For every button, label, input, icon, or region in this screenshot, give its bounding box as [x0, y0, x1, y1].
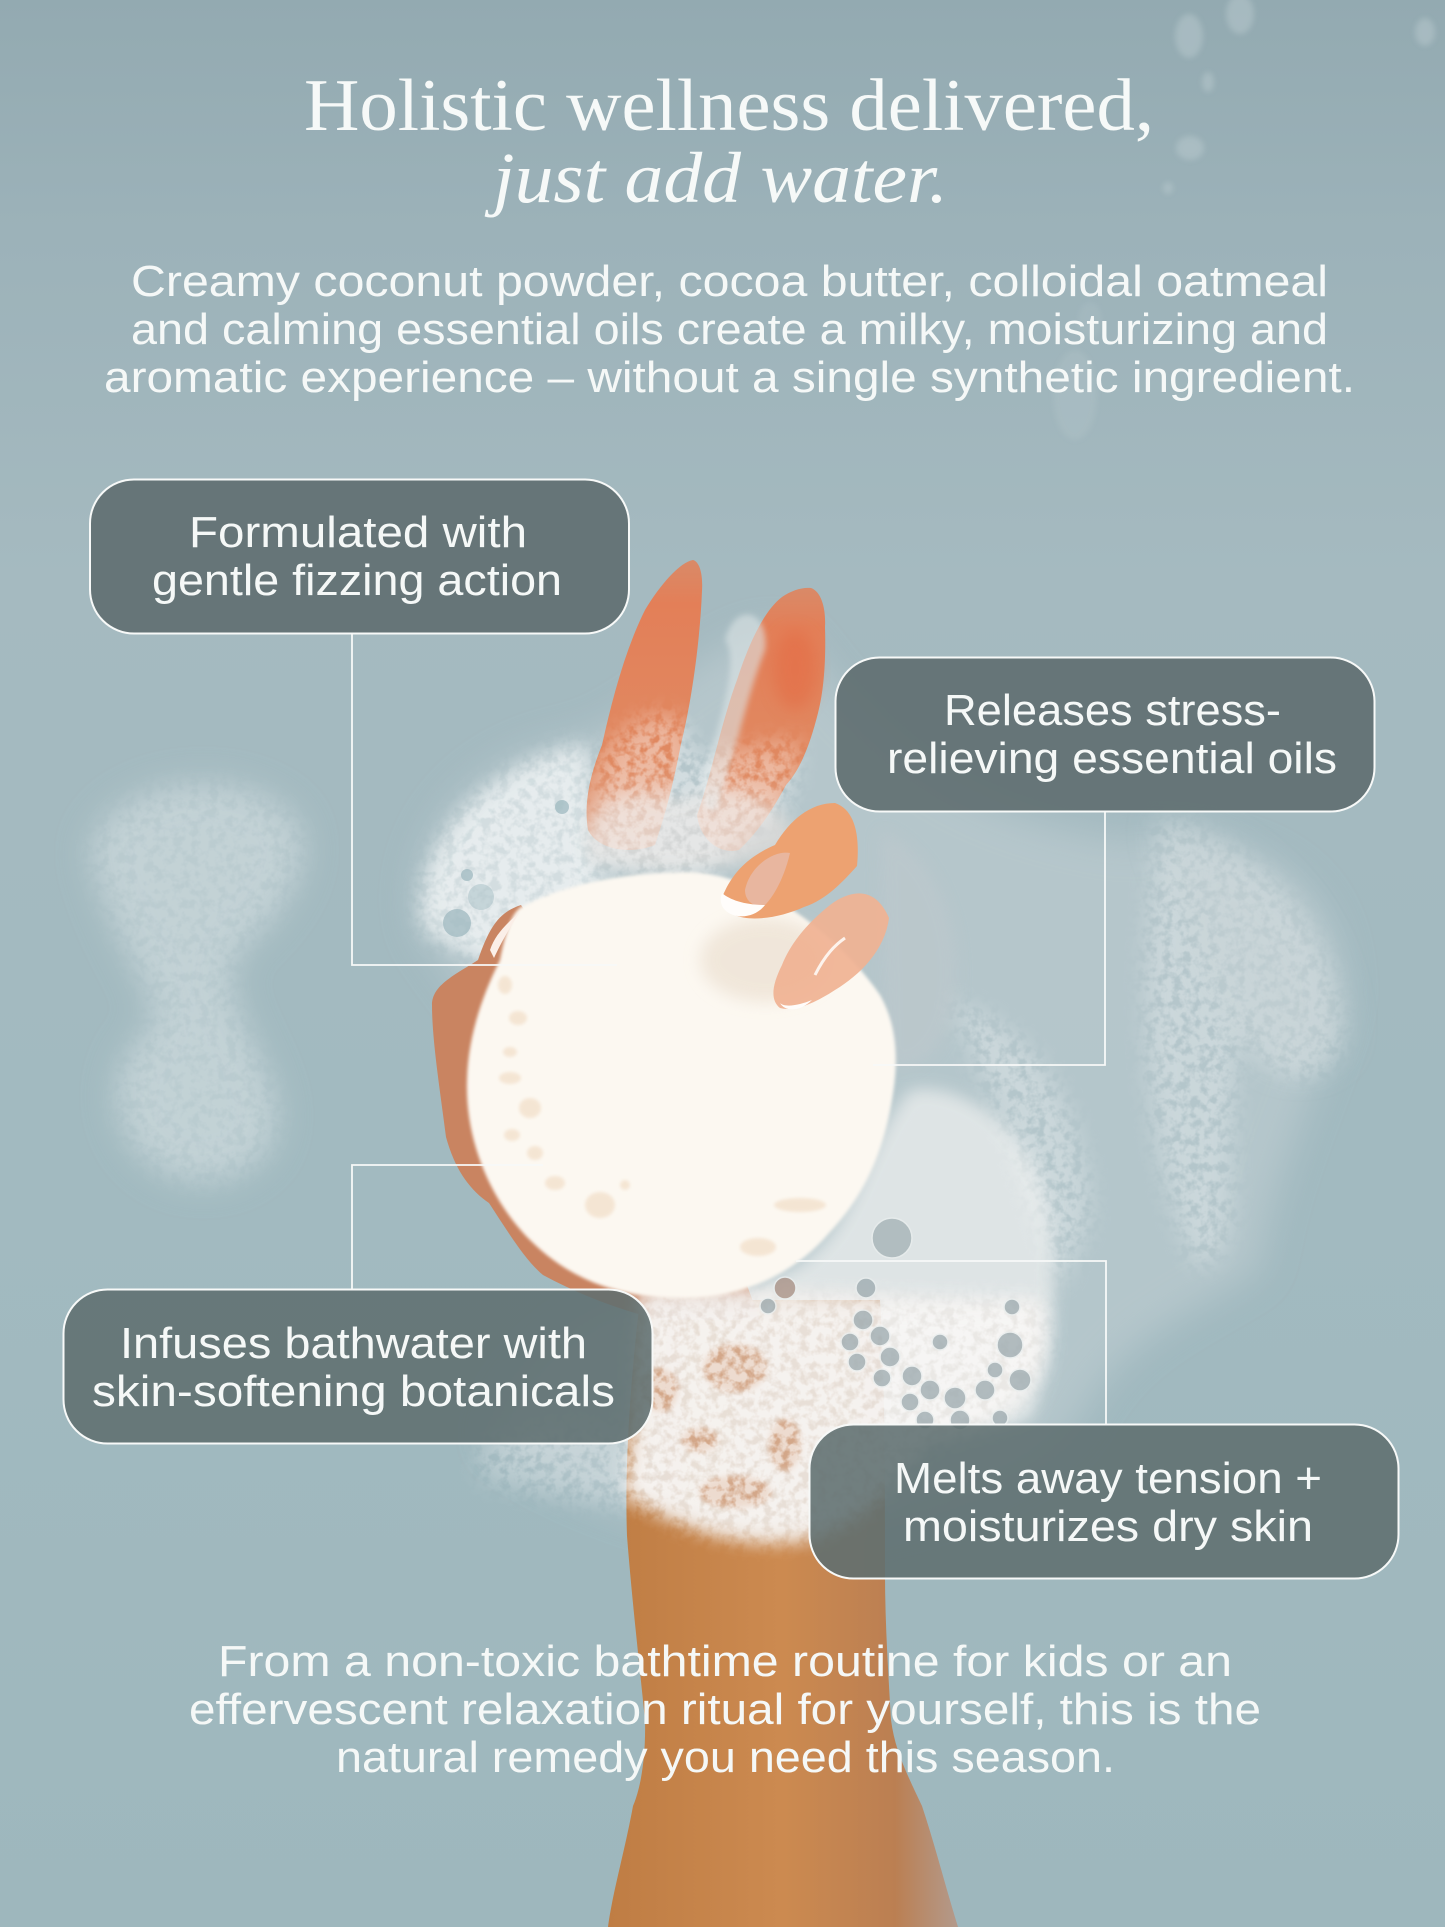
- callout: botanicals: Infuses bathwater with: [120, 1319, 587, 1368]
- thumb nail on left: [490, 912, 520, 958]
- intro text: and calming essential oils create a milky, moisturizing and: [131, 305, 1328, 354]
- callout: gentle fizzing: Formulated with: [189, 508, 527, 557]
- callout: essential oils: [836, 658, 1374, 812]
- hand palm: [432, 905, 760, 1320]
- bubbles: [760, 1218, 1031, 1430]
- callout: tension: Melts away tension +: [894, 1454, 1322, 1503]
- finger two: [697, 588, 825, 851]
- soft water bubbles at left foam: [443, 800, 569, 937]
- callout: essential oils: Releases stress-: [944, 686, 1281, 735]
- finger four: [773, 893, 889, 1009]
- intro text: [104, 257, 1355, 402]
- closing text: natural remedy you need this season.: [336, 1733, 1115, 1782]
- foam behind the hand: [416, 632, 1341, 1540]
- arm: [608, 1300, 958, 1927]
- foam over wrist: [480, 1287, 1044, 1542]
- intro text: aromatic experience – without a single synthetic ingredient.: [104, 353, 1355, 402]
- callout: essential oils: relieving essential oils: [887, 734, 1337, 783]
- callout line: fizzing: [352, 634, 617, 965]
- callout: tension: [810, 1424, 1398, 1578]
- soap disc: [467, 872, 896, 1298]
- callout: gentle fizzing: gentle fizzing action: [152, 556, 562, 605]
- callout: botanicals: [64, 1290, 652, 1444]
- callout line: essential oils: [873, 812, 1105, 1065]
- title: [304, 65, 1154, 218]
- finger one: [587, 560, 702, 850]
- closing text: [189, 1637, 1261, 1782]
- faint foam on the left: [90, 784, 303, 1182]
- closing text: From a non-toxic bathtime routine for kids or an: [218, 1637, 1232, 1686]
- title: just add water.: [484, 138, 948, 218]
- closing text: effervescent relaxation ritual for yourself, this is the: [189, 1685, 1261, 1734]
- finger three with nail: [721, 803, 858, 918]
- soap pores: [498, 976, 826, 1256]
- callout: botanicals: skin-softening botanicals: [92, 1367, 615, 1416]
- callout line: tension: [796, 1261, 1106, 1424]
- callout: gentle fizzing: [90, 480, 629, 634]
- intro text: Creamy coconut powder, cocoa butter, colloidal oatmeal: [131, 257, 1328, 306]
- callout: tension: moisturizes dry skin: [903, 1502, 1313, 1551]
- callout line: botanicals: [352, 1165, 543, 1289]
- title: Holistic wellness delivered,: [304, 65, 1154, 147]
- water droplets top right: [1053, 0, 1435, 440]
- finger highlights and foam between fingers: [586, 615, 817, 880]
- soap shadow under fingers: [700, 918, 830, 1002]
